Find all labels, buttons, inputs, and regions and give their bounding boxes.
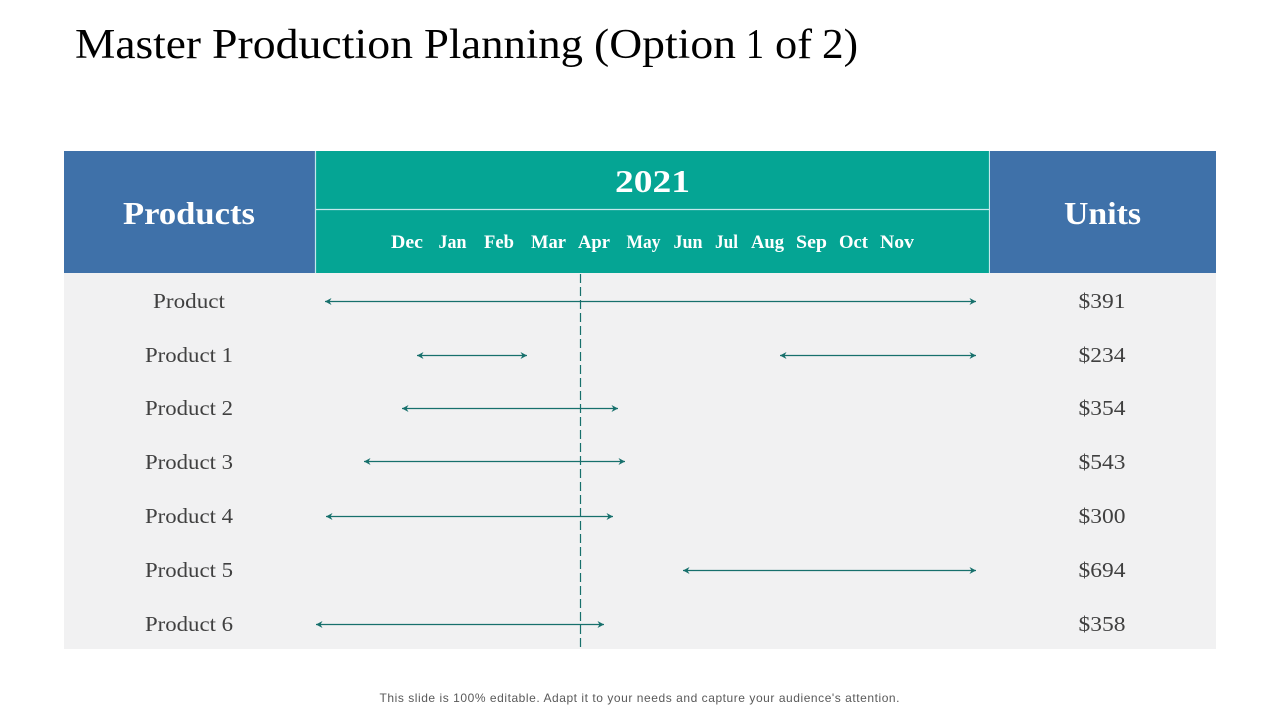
- unit values: $543: [1078, 450, 1126, 474]
- table body panel: [64, 273, 1216, 649]
- month labels: Dec: [391, 233, 423, 253]
- panel: units header: Units: [1064, 195, 1141, 231]
- panel: units header: [990, 151, 1216, 273]
- title: 1: [746, 22, 764, 68]
- product labels: Product 6: [145, 612, 233, 636]
- schedule arrows: [316, 302, 976, 624]
- panel: timeline header: [315, 151, 990, 273]
- title: Master: [75, 22, 201, 68]
- month labels: Apr: [578, 233, 610, 253]
- dashed current-date line: [580, 274, 582, 650]
- month labels: [391, 233, 915, 253]
- product labels: Product: [153, 289, 225, 313]
- month labels: Nov: [880, 233, 915, 253]
- month labels: Aug: [751, 233, 785, 253]
- month labels: Jul: [715, 233, 738, 253]
- product labels: Product 5: [145, 558, 233, 582]
- month labels: Jun: [674, 233, 703, 253]
- unit values: $358: [1078, 612, 1126, 636]
- product labels: [145, 289, 233, 636]
- title: (Option: [594, 22, 736, 68]
- unit values: $694: [1078, 558, 1126, 582]
- year heading: 2021: [615, 163, 690, 199]
- month labels: Oct: [839, 233, 869, 253]
- month labels: Feb: [484, 233, 514, 253]
- product labels: Product 2: [145, 396, 233, 420]
- title: Production: [212, 22, 413, 68]
- month labels: Jan: [438, 233, 467, 253]
- title: Planning: [424, 22, 583, 68]
- unit values: $354: [1078, 396, 1126, 420]
- unit values: $300: [1078, 504, 1126, 528]
- footer note: This slide is 100% editable. Adapt it to your needs and capture your audience's attention.: [380, 691, 900, 705]
- unit values: $234: [1078, 343, 1126, 367]
- unit values: $391: [1078, 289, 1126, 313]
- panel: products header: [64, 151, 315, 273]
- product labels: Product 1: [145, 343, 233, 367]
- month labels: May: [626, 233, 661, 253]
- product labels: Product 4: [145, 504, 233, 528]
- title: of: [775, 22, 812, 68]
- product labels: Product 3: [145, 450, 233, 474]
- panel: products header: Products: [123, 195, 255, 231]
- title: 2): [822, 22, 858, 68]
- month labels: Sep: [796, 233, 827, 253]
- month labels: Mar: [531, 233, 566, 253]
- unit values: [1078, 289, 1126, 636]
